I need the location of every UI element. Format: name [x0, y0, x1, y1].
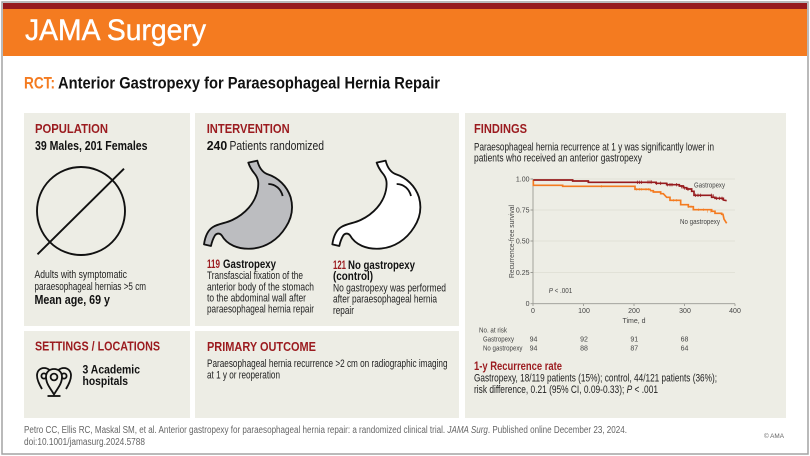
- y axis labels: 0.75: [516, 207, 530, 214]
- arm: no gastropexy: repair: [333, 305, 354, 317]
- arm: no gastropexy: [333, 258, 446, 317]
- arm: gastropexy: to the abdominal wall after: [207, 293, 306, 305]
- p value: P < .001: [549, 286, 572, 295]
- arm: gastropexy: Transfascial fixation of the: [207, 270, 303, 282]
- x axis labels: [531, 308, 741, 325]
- arm: no gastropexy: No gastropexy was performed: [333, 283, 446, 295]
- arm: gastropexy: paraesophageal hernia repair: [207, 304, 314, 316]
- x axis labels: 0: [531, 308, 535, 315]
- mean age: Mean age, 69 y: [34, 293, 110, 307]
- arm: gastropexy: 119: [207, 257, 220, 271]
- y axis labels: 0.50: [516, 238, 530, 245]
- table: number at risk: 87: [630, 346, 638, 353]
- x axis labels: Time, d: [622, 318, 646, 325]
- arm: no gastropexy: 121: [333, 258, 346, 272]
- findings summary: patients who received an anterior gastropexy: [474, 153, 643, 165]
- outcome description: at 1 y or reoperation: [207, 370, 280, 382]
- table: number at risk: Gastropexy: [483, 337, 514, 344]
- arm: no gastropexy: No gastropexy: [348, 258, 415, 272]
- curve label: gastropexy: Gastropexy: [694, 182, 725, 189]
- table: number at risk: No gastropexy: [483, 346, 523, 353]
- arm: gastropexy: [207, 257, 314, 316]
- heading: primary outcome: PRIMARY OUTCOME: [207, 339, 316, 354]
- heading: population: POPULATION: [35, 121, 108, 136]
- table: number at risk: [479, 328, 688, 353]
- icon: stomach gastropexy: [204, 161, 292, 249]
- heading: recurrence rate: 1-y Recurrence rate: [474, 359, 562, 373]
- table: number at risk: 92: [580, 337, 588, 344]
- citation: doi:10.1001/jamasurg.2024.5788: [24, 437, 145, 448]
- hospitals label: [82, 363, 140, 388]
- heading: intervention: INTERVENTION: [207, 121, 290, 136]
- curve: gastropexy: [533, 180, 727, 201]
- patients randomized: [207, 139, 324, 153]
- header banner: [3, 3, 807, 56]
- table: number at risk: 64: [681, 346, 688, 353]
- arm: gastropexy: anterior body of the stomach: [207, 281, 314, 293]
- curve: no gastropexy: [533, 180, 727, 223]
- citation: [24, 425, 627, 448]
- x axis labels: 400: [729, 308, 741, 315]
- y axis labels: 0.25: [516, 270, 530, 277]
- recurrence rate results: Gastropexy, 18/119 patients (15%); control, 44/121 patients (36%);: [474, 373, 717, 385]
- x axis labels: 300: [679, 308, 691, 315]
- y axis labels: 1.00: [516, 176, 530, 183]
- copyright: © AMA: [764, 432, 784, 440]
- findings summary: [474, 142, 714, 165]
- heading: settings: SETTINGS / LOCATIONS: [35, 339, 160, 354]
- panel: intervention: [195, 113, 459, 326]
- icon: hernia circle with slash: [37, 167, 125, 255]
- patients randomized: 240: [207, 139, 227, 153]
- population description: [34, 269, 146, 293]
- x axis labels: 200: [628, 308, 640, 315]
- x axis labels: 100: [578, 308, 590, 315]
- table: number at risk: No. at risk: [479, 328, 507, 335]
- table: number at risk: 88: [580, 346, 588, 353]
- population description: paraesophageal hernias >5 cm: [34, 281, 146, 293]
- curve label: no gastropexy: No gastropexy: [680, 219, 720, 226]
- title: Anterior Gastropexy for Paraesophageal Hernia Repair: [58, 75, 441, 93]
- findings summary: Paraesophageal hernia recurrence at 1 y was significantly lower in: [474, 142, 714, 154]
- arm: no gastropexy: (control): [333, 269, 373, 283]
- hospitals label: hospitals: [82, 374, 128, 388]
- patients randomized: Patients randomized: [230, 139, 324, 153]
- y axis labels: [516, 176, 530, 308]
- outcome description: [207, 358, 448, 382]
- panel: findings: [465, 113, 786, 418]
- title: RCT:: [24, 75, 55, 93]
- journal name: JAMA Surgery: [25, 14, 206, 47]
- table: number at risk: 68: [681, 337, 688, 344]
- y axis title: Recurrence-free survival: [509, 205, 516, 278]
- hospitals label: 3 Academic: [82, 363, 140, 377]
- table: number at risk: 94: [530, 337, 537, 344]
- population description: Adults with symptomatic: [34, 269, 128, 281]
- citation: Petro CC, Ellis RC, Maskal SM, et al. Anterior gastropexy for paraesophageal hernia repair: a randomized clinical trial. JAMA Surg. Published online December 23, 2024.: [24, 425, 627, 436]
- table: number at risk: 91: [630, 337, 638, 344]
- table: number at risk: 94: [530, 346, 537, 353]
- icon: location pins: [37, 368, 71, 396]
- chart: recurrence-free survival: [479, 176, 741, 353]
- outcome description: Paraesophageal hernia recurrence >2 cm on radiographic imaging: [207, 358, 448, 370]
- recurrence rate results: [474, 373, 717, 396]
- icon: stomach no gastropexy: [332, 161, 420, 249]
- panel: settings and locations: [24, 331, 190, 418]
- sex counts: 39 Males, 201 Females: [35, 139, 148, 153]
- y axis labels: 0: [526, 301, 530, 308]
- heading: findings: FINDINGS: [474, 121, 527, 136]
- arm: no gastropexy: after paraesophageal hernia: [333, 294, 437, 306]
- panel: population: [24, 113, 190, 326]
- recurrence rate results: risk difference, 0.21 (95% CI, 0.09-0.33); P < .001: [474, 384, 658, 396]
- panel: primary outcome: [195, 331, 459, 418]
- arm: gastropexy: Gastropexy: [223, 257, 276, 271]
